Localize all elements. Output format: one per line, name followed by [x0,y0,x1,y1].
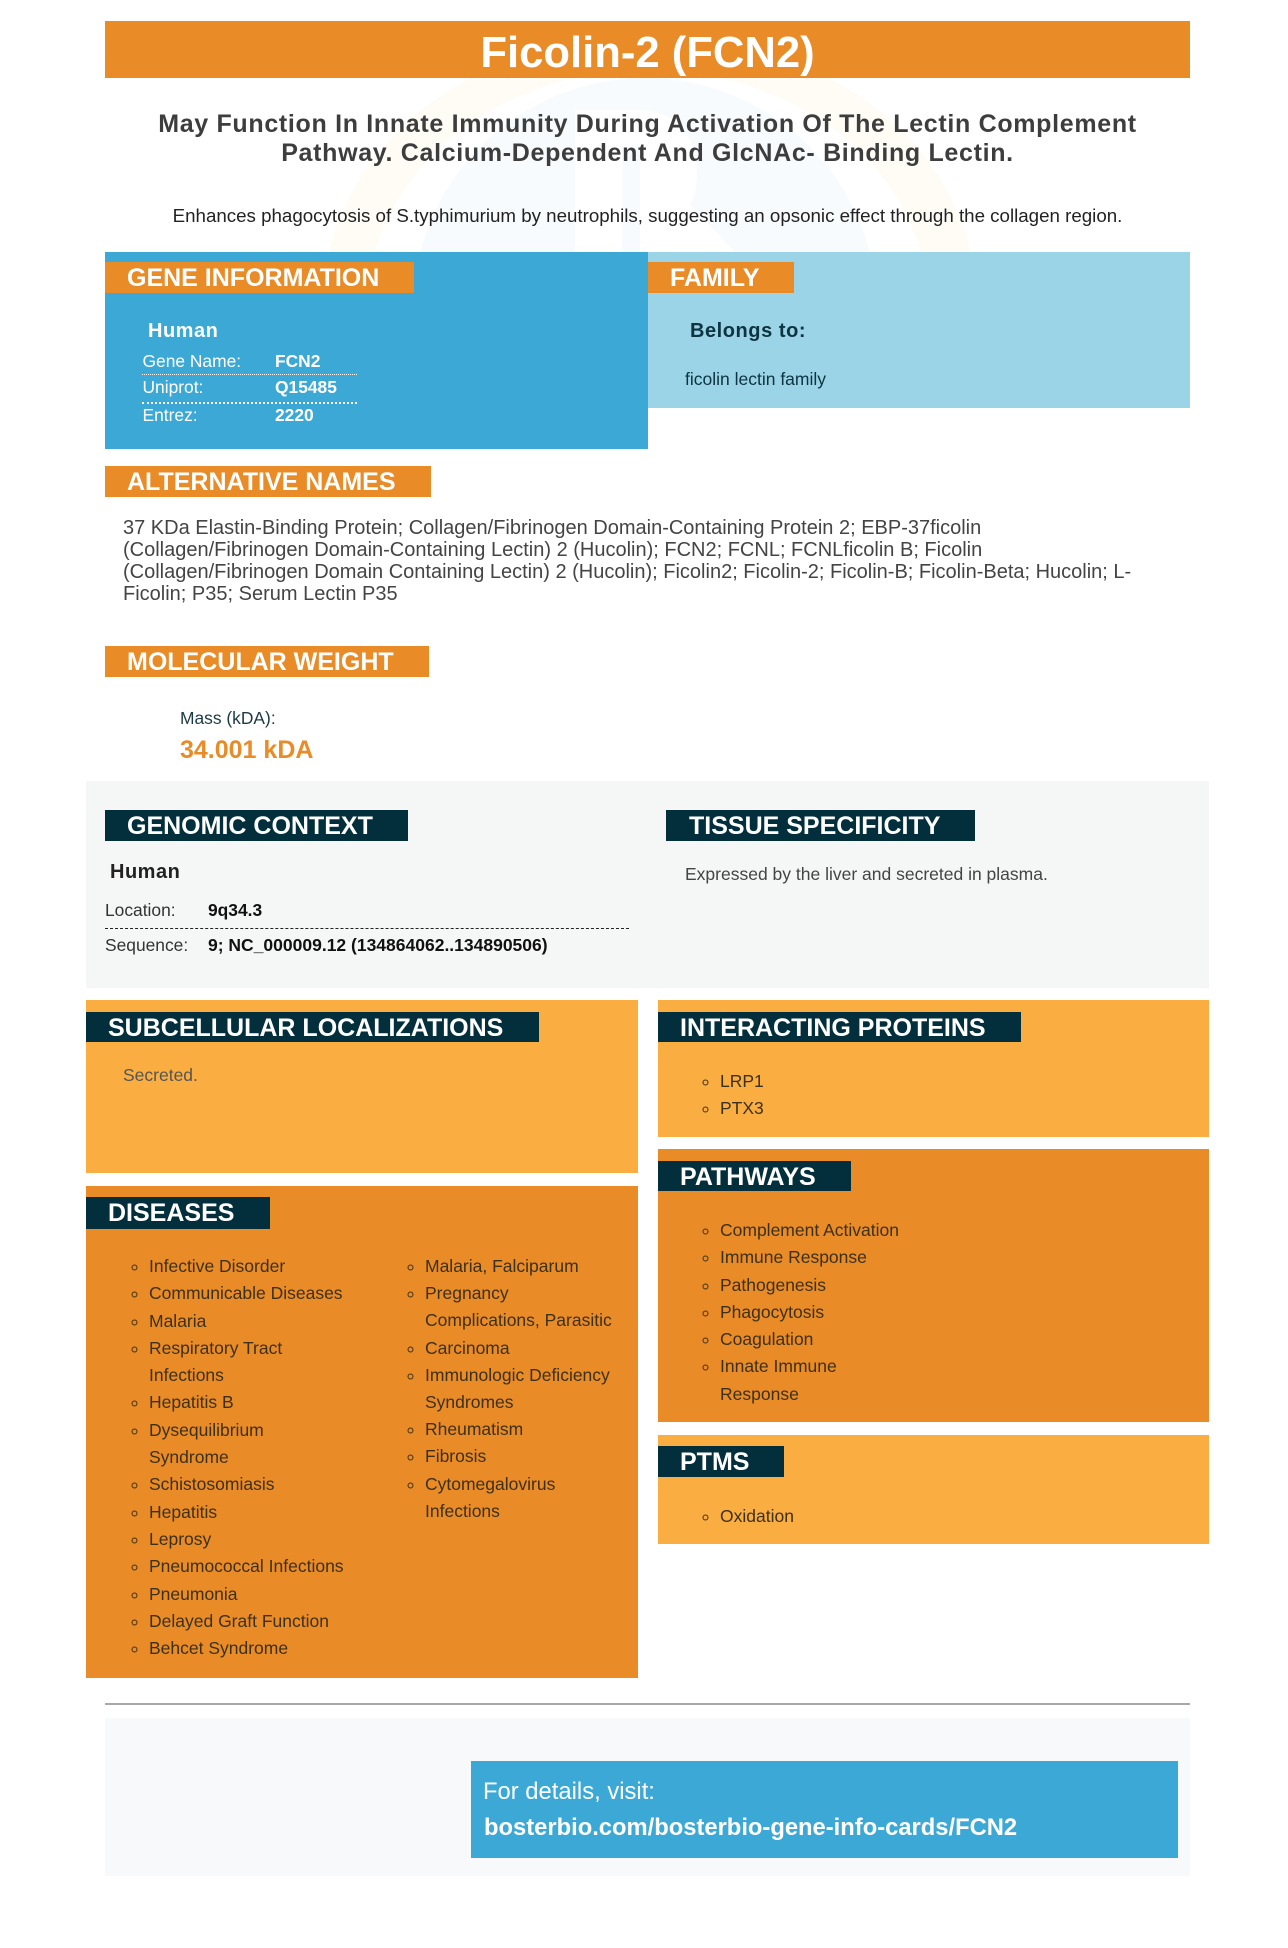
watermark: faint logo behind header [330,78,970,252]
subtitle: Pathway. Calcium-Dependent And GlcNAc- Binding Lectin. [281,139,1014,167]
alternative names text [123,517,1131,605]
heading: tissue specificity: TISSUE SPECIFICITY [689,812,940,840]
heading: molecular weight: MOLECULAR WEIGHT [127,648,394,676]
mass label: Mass (kDA): [180,708,276,728]
pathway list: Complement Activation [720,1220,899,1240]
alternative names text: Ficolin; P35; Serum Lectin P35 [123,583,398,605]
disease list: left column: Pneumococcal Infections [149,1556,344,1576]
family value: ficolin lectin family [685,369,826,389]
disease list: left column: Hepatitis [149,1502,217,1522]
ptm list: Oxidation [720,1506,794,1526]
disease list: left column: Pneumonia [149,1584,238,1604]
heading: alternative names: ALTERNATIVE NAMES [127,468,396,496]
heading: gene information: GENE INFORMATION [127,264,379,292]
gene name row: FCN2 [275,351,320,371]
uniprot row: Q15485 [275,377,337,397]
pathway list: Coagulation [720,1329,813,1349]
disease list: right column: Carcinoma [425,1338,510,1358]
disease list: left column: Malaria [149,1311,206,1331]
heading: subcellular localizations: SUBCELLULAR LOCALIZATIONS [108,1014,503,1042]
belongs to label: Belongs to: [690,320,806,342]
disease list: right column: Pregnancy [425,1283,509,1303]
panel: ptms [658,1435,1209,1544]
description: Enhances phagocytosis of S.typhimurium by neutrophils, suggesting an opsonic effect through the collagen region. [173,205,1122,226]
heading: pathways: PATHWAYS [680,1163,816,1191]
subtitle: May Function In Innate Immunity During Activation Of The Lectin Complement [158,110,1137,138]
pathway list [702,1220,899,1404]
panel: pathways [658,1149,1209,1422]
heading: family [648,262,794,293]
pathway list: Pathogenesis [720,1275,826,1295]
heading: interacting proteins: INTERACTING PROTEINS [680,1014,986,1042]
disease list: left column: Delayed Graft Function [149,1611,329,1631]
disease list: right column: Rheumatism [425,1419,523,1439]
disease list: left column: Behcet Syndrome [149,1638,288,1658]
callout text: For details, visit: [483,1778,655,1805]
disease list: right column: Cytomegalovirus [425,1474,555,1494]
location row [105,885,629,929]
disease list: right column: Infections [425,1501,500,1521]
disease list: right column: Fibrosis [425,1446,486,1466]
alternative names text: (Collagen/Fibrinogen Domain Containing Lectin) 2 (Hucolin); Ficolin2; Ficolin-2; Ficolin-B; Ficolin-Beta; Hucolin; L- [123,561,1131,583]
heading: diseases [86,1197,270,1229]
disease list: right column: Syndromes [425,1392,514,1412]
disease list: left column: Respiratory Tract [149,1338,282,1358]
uniprot row: Uniprot: [142,377,203,397]
location row: Location: [105,900,176,920]
entrez row: 2220 [275,405,314,425]
panel: family [648,252,1190,408]
mass value: 34.001 kDA [180,736,313,764]
species label: Human [110,861,180,883]
panel: diseases [86,1186,638,1678]
heading: pathways [658,1161,851,1191]
disease list: right column: Immunologic Deficiency [425,1365,610,1385]
heading: family: FAMILY [670,264,759,292]
alternative names text: (Collagen/Fibrinogen Domain-Containing Lectin) 2 (Hucolin); FCN2; FCNL; FCNLficolin B; Ficolin [123,539,982,561]
pathway list: Response [720,1384,799,1404]
disease list: left column: Communicable Diseases [149,1283,343,1303]
disease list: left column: Schistosomiasis [149,1474,274,1494]
localization text: Secreted. [123,1065,198,1085]
gene name row [142,349,357,375]
title bar [105,21,1190,78]
callout url: bosterbio.com/bosterbio-gene-info-cards/FCN2 [484,1814,1017,1841]
disease list: left column [132,1256,344,1658]
uniprot row [142,375,357,404]
heading: ptms [658,1446,784,1477]
species label: Human [148,320,218,342]
tissue specificity text: Expressed by the liver and secreted in plasma. [685,864,1048,884]
panel: genomic context and tissue specificity [86,781,1209,988]
pathway list: Immune Response [720,1247,867,1267]
panel: footer [105,1718,1190,1876]
sequence row: 9; NC_000009.12 (134864062..134890506) [208,935,548,955]
disease list: left column: Syndrome [149,1447,229,1467]
pathway list: Innate Immune [720,1356,837,1376]
panel: gene information [105,252,648,449]
sequence row: Sequence: [105,935,188,955]
protein list: PTX3 [720,1098,764,1118]
gene name row: Gene Name: [142,351,241,371]
heading: ptms: PTMS [680,1448,749,1476]
disease list: left column: Hepatitis B [149,1392,234,1412]
panel: subcellular localizations [86,1000,638,1173]
disease list: left column: Leprosy [149,1529,211,1549]
disease list: right column [408,1256,612,1521]
disease list: right column: Malaria, Falciparum [425,1256,579,1276]
protein list: LRP1 [720,1071,764,1091]
disease list: left column: Dysequilibrium [149,1420,264,1440]
protein list [702,1071,764,1118]
heading: diseases: DISEASES [108,1199,234,1227]
pathway list: Phagocytosis [720,1302,824,1322]
entrez row [142,405,314,425]
callout: details link [471,1761,1178,1858]
subtitle [158,110,1137,167]
disease list: left column: Infections [149,1365,224,1385]
location row: 9q34.3 [208,900,262,920]
disease list: right column: Complications, Parasitic [425,1310,612,1330]
alternative names text: 37 KDa Elastin-Binding Protein; Collagen/Fibrinogen Domain-Containing Protein 2; EBP-37ficolin [123,517,981,539]
disease list: left column: Infective Disorder [149,1256,285,1276]
heading: genomic context: GENOMIC CONTEXT [127,812,373,840]
entrez row: Entrez: [142,405,198,425]
panel: interacting proteins [658,1000,1209,1137]
title bar: Ficolin-2 (FCN2) [480,29,815,77]
